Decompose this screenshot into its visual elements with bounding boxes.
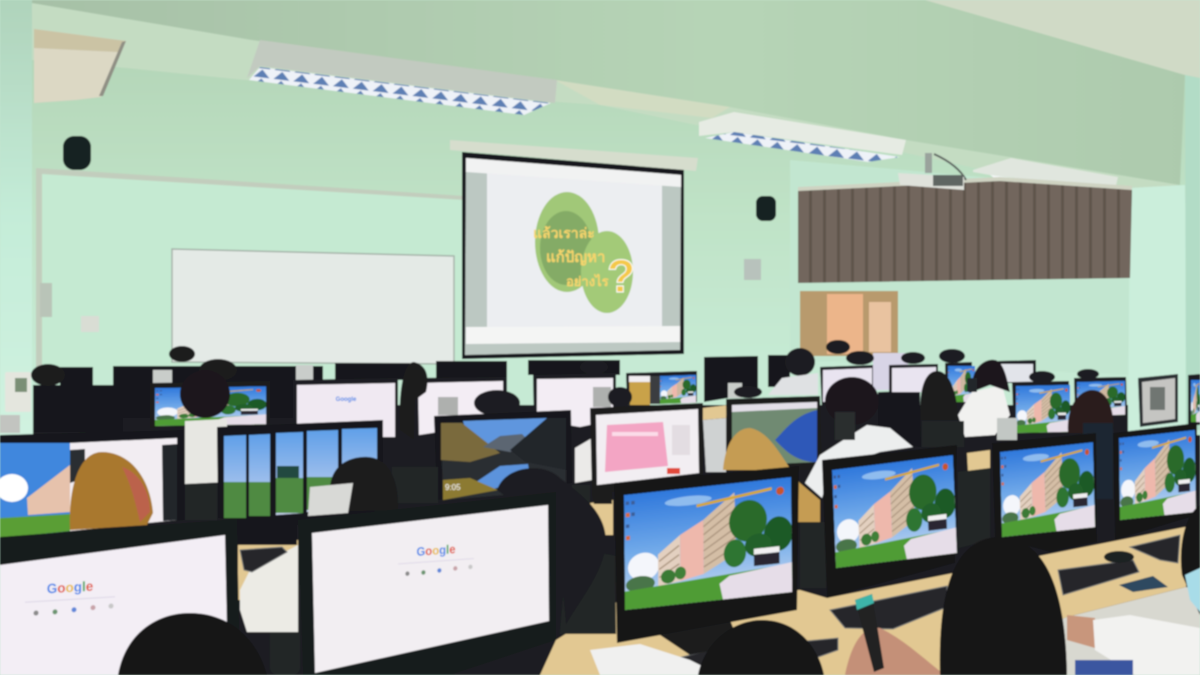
slide graphic: แก้ปัญหา <box>546 249 605 266</box>
projector <box>898 153 966 190</box>
slide graphic: อย่างไร <box>566 273 609 289</box>
student with dyed hair <box>70 452 153 530</box>
desk surfaces <box>238 405 1195 675</box>
phone on desk <box>1119 576 1168 592</box>
lake wallpaper monitor: 9:05 <box>445 483 461 492</box>
front right student shirt <box>1067 505 1200 675</box>
right pillar <box>1128 185 1190 435</box>
doorway <box>800 291 898 356</box>
ceiling light right <box>973 158 1118 194</box>
back row monitor with wallpaper left <box>150 381 270 428</box>
student behind screen <box>330 457 398 512</box>
speaker left <box>63 136 91 170</box>
student shirt <box>240 545 298 632</box>
front centre monitor with campus wallpaper <box>614 466 799 643</box>
right ceiling corner <box>925 0 1200 78</box>
ceiling bulkhead band <box>32 0 1185 185</box>
front row shirt and head centre <box>590 620 824 675</box>
chairs <box>183 421 990 675</box>
keyboards <box>240 535 1180 672</box>
white shirt student right <box>805 377 913 498</box>
ceiling light left <box>247 40 557 115</box>
map monitor <box>726 396 822 470</box>
back row colourful monitor <box>626 371 697 405</box>
speaker right <box>756 196 776 221</box>
pink web page monitor <box>590 403 703 504</box>
window blinds <box>798 177 1132 283</box>
left wall pillar <box>0 0 32 435</box>
panel rail <box>36 168 465 370</box>
thermostat on pillar <box>0 372 31 433</box>
ceiling soffit <box>32 3 1180 190</box>
student holding phone <box>845 594 945 675</box>
right wall section <box>790 160 1130 375</box>
back wall lower panel <box>42 170 465 370</box>
monitor right 2 <box>992 433 1097 552</box>
back row dark monitors <box>33 355 921 447</box>
back row white monitor centre left <box>414 377 507 450</box>
front row student head left <box>118 613 267 675</box>
blonde student <box>723 428 820 522</box>
monitor right 3 <box>1113 423 1197 540</box>
pale strip <box>555 80 730 118</box>
front left monitor with Google <box>0 519 240 675</box>
whiteboard <box>172 249 454 364</box>
lake wallpaper monitor <box>434 410 572 500</box>
back row Google monitor: Google <box>336 397 357 403</box>
wall-plate cards behind monitors <box>153 365 742 398</box>
far-left monitor with window <box>0 430 185 540</box>
fields wallpaper monitor <box>217 420 398 632</box>
back row students <box>31 340 1113 499</box>
dark furniture base behind the rows <box>0 405 1200 675</box>
back row Google monitor <box>293 378 398 440</box>
student in black centre <box>497 468 606 625</box>
right back row monitors <box>820 353 1200 437</box>
slide graphic: แล้วเราล่ะ <box>533 225 595 241</box>
wall switches <box>40 259 761 332</box>
air conditioner <box>34 29 126 103</box>
front right student long hair <box>940 537 1067 675</box>
slide graphic <box>533 192 635 313</box>
back row white monitor centre <box>533 373 616 432</box>
pale floor at lower right <box>930 587 1200 675</box>
front centre monitor stand <box>660 620 740 655</box>
monitor right 1 <box>822 445 958 598</box>
mouse on desk <box>1104 551 1134 563</box>
projection screen <box>450 140 698 359</box>
front centre monitor with Google <box>298 492 556 675</box>
ceiling light centre <box>699 112 906 162</box>
slide graphic: ? <box>607 250 635 302</box>
